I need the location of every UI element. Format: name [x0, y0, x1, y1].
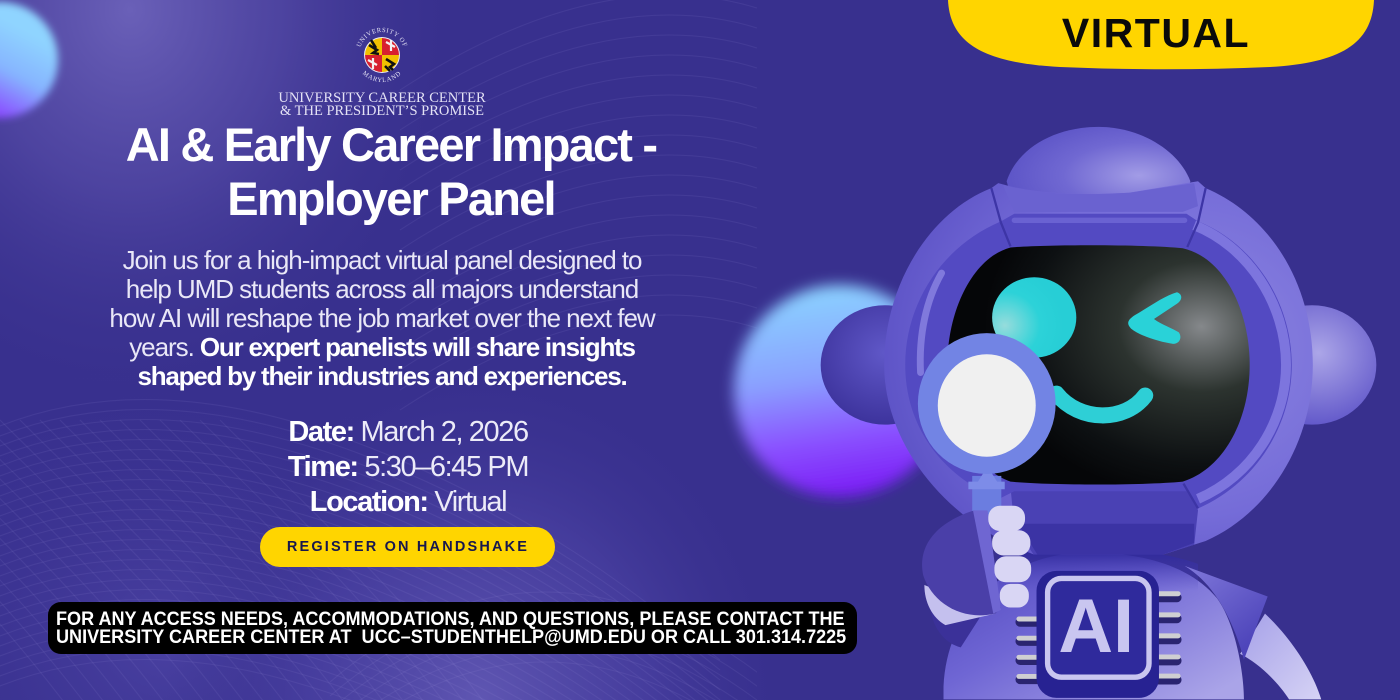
logo: university seal: UNIVERSITY OF — [356, 28, 408, 46]
event details — [288, 416, 528, 518]
robot body — [944, 552, 1244, 699]
badge: virtual: VIRTUAL — [1062, 10, 1250, 56]
logo text: career center: & THE PRESIDENT’S PROMISE — [280, 102, 484, 118]
notice text: UNIVERSITY CAREER CENTER AT UCC–STUDENTHELP@UMD.EDU OR CALL 301.314.7225 — [56, 626, 846, 648]
event details: Date: March 2, 2026 — [288, 416, 528, 448]
robot helmet crown band — [1003, 183, 1198, 212]
robot dome — [1007, 127, 1190, 208]
robot eye wink — [1128, 292, 1181, 344]
title — [126, 118, 656, 225]
robot collar — [1010, 487, 1198, 554]
notice text: FOR ANY ACCESS NEEDS, ACCOMMODATIONS, AND QUESTIONS, PLEASE CONTACT THE — [56, 609, 845, 630]
description: help UMD students across all majors understand — [126, 274, 638, 304]
description: how AI will reshape the job market over the next few — [109, 303, 655, 333]
robot hand — [922, 506, 1031, 647]
title: AI & Early Career Impact - — [126, 118, 656, 171]
event details: Location: Virtual — [310, 486, 506, 518]
robot neck shadow — [999, 548, 1198, 591]
robot arm hose — [1240, 614, 1321, 699]
robot screen — [947, 245, 1250, 485]
robot visor highlights — [920, 188, 1286, 508]
description — [109, 245, 656, 391]
description: Join us for a high-impact virtual panel designed to — [123, 245, 641, 275]
robot shoulder flap — [1185, 566, 1268, 660]
title: Employer Panel — [227, 172, 555, 225]
robot smile — [1056, 394, 1145, 415]
robot eye open — [992, 277, 1076, 358]
access notice — [48, 602, 857, 654]
logo text: career center — [278, 90, 486, 118]
button: register: REGISTER ON HANDSHAKE — [287, 539, 529, 555]
description: shaped by their industries and experiences. — [138, 361, 626, 391]
robot helmet — [884, 181, 1313, 554]
robot ears — [821, 305, 1376, 425]
button: register — [260, 527, 555, 567]
notice text — [56, 609, 846, 648]
robot visor frame — [905, 214, 1292, 508]
description: years. Our expert panelists will share insights — [129, 332, 635, 362]
event details: Time: 5:30–6:45 PM — [288, 451, 528, 483]
AI chip: AI — [1058, 584, 1134, 669]
logo text: career center: UNIVERSITY CAREER CENTER — [278, 90, 486, 106]
logo: university seal: MARYLAND — [362, 70, 400, 82]
AI chip — [1019, 571, 1178, 698]
magnifying glass — [918, 333, 1056, 518]
